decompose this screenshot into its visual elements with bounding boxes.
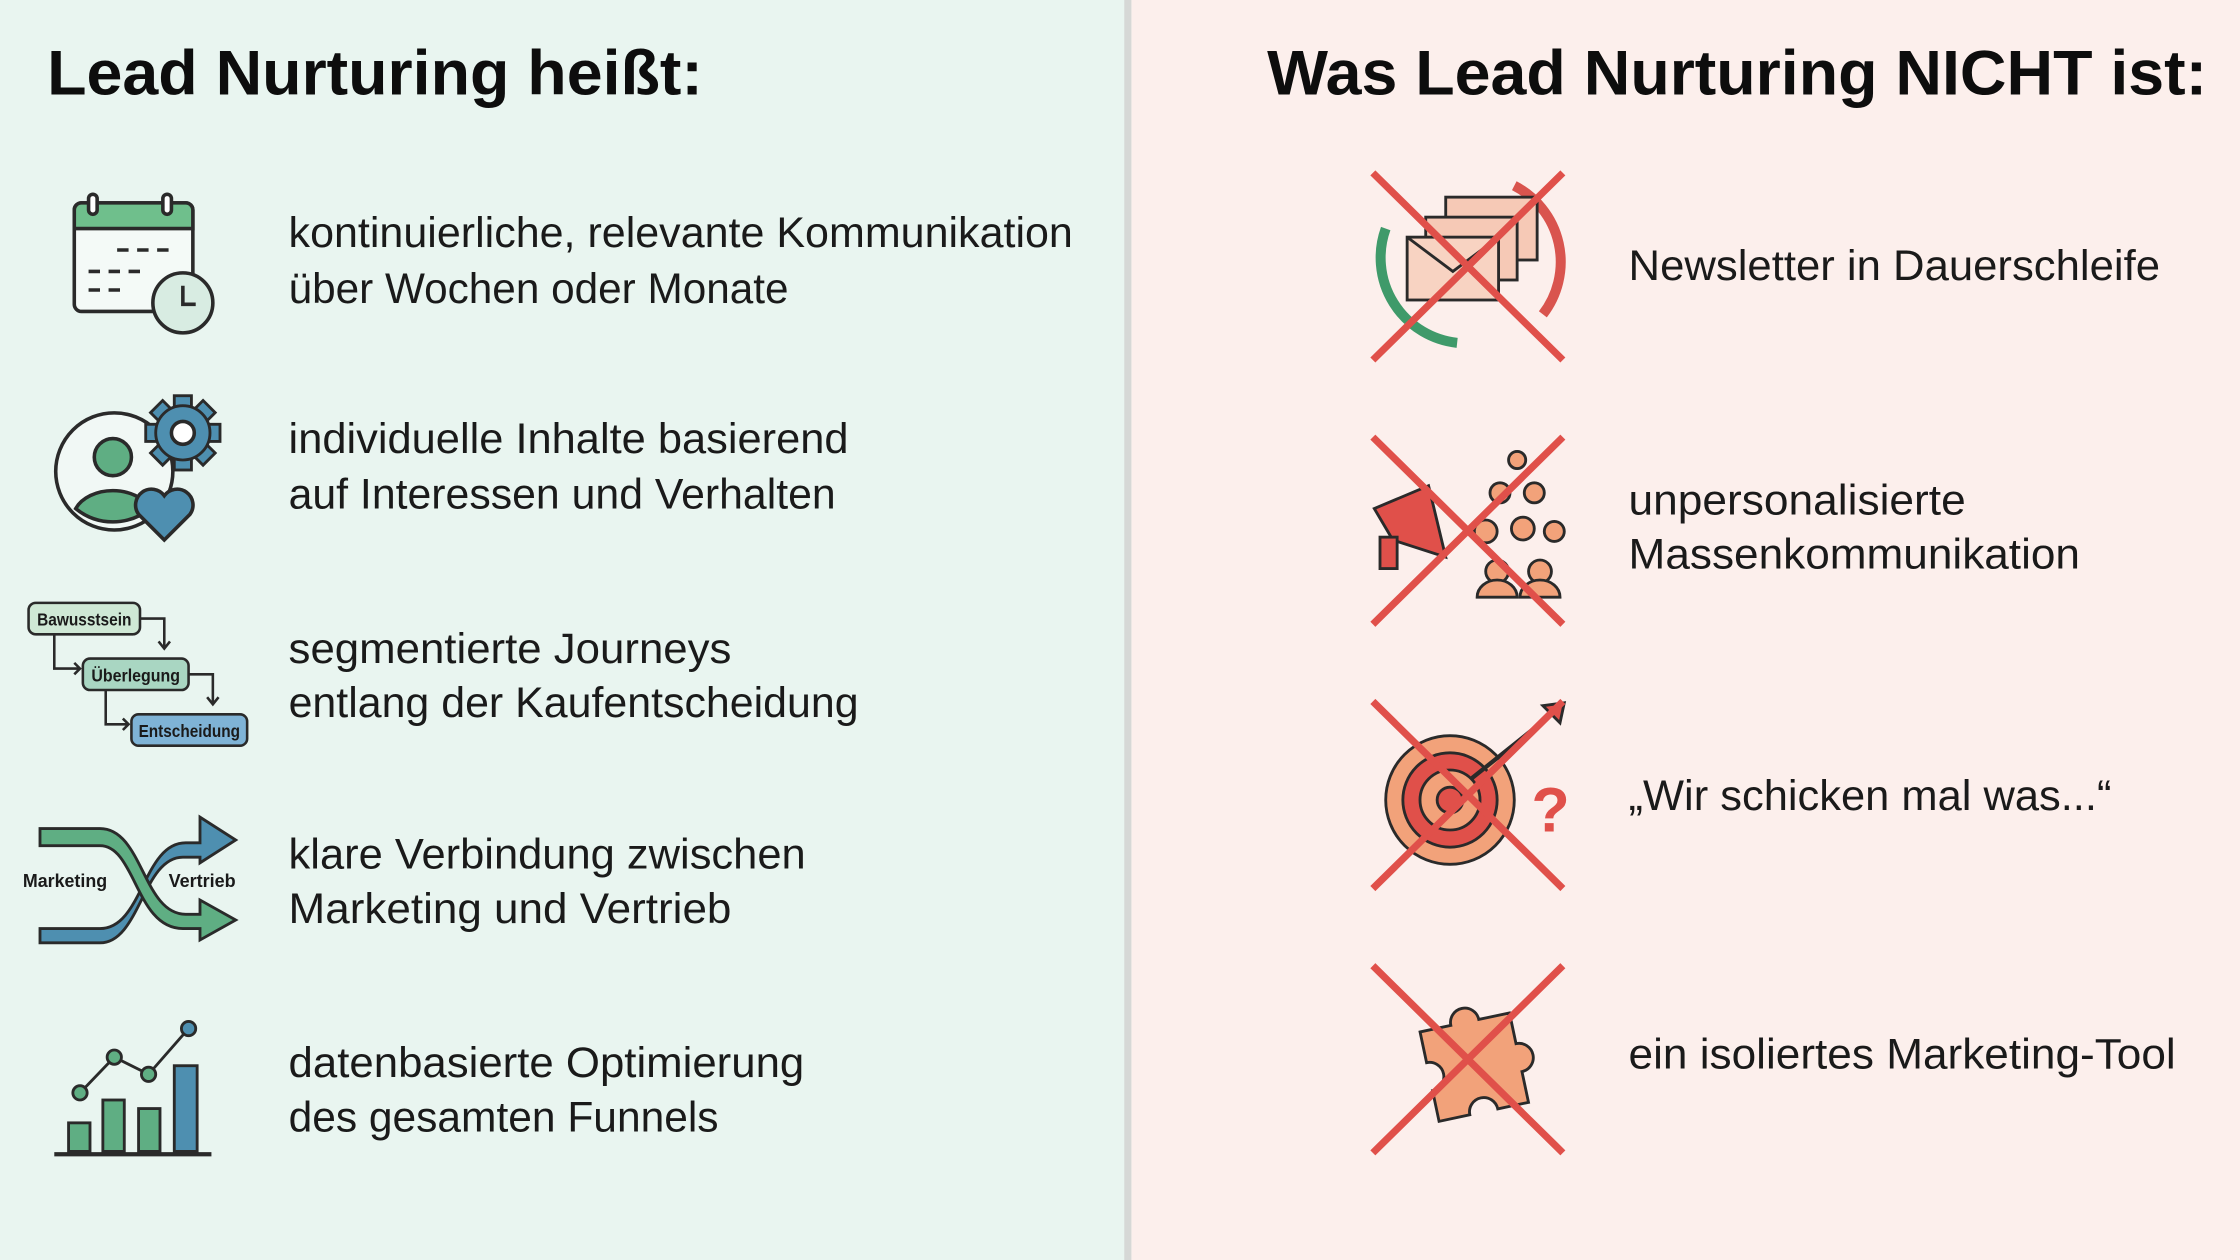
text: item 2: auf Interessen und Verhalten <box>289 471 836 519</box>
icon: marketing-vertrieb arrows: Vertrieb <box>169 870 236 891</box>
text: item 3: segmentierte Journeys <box>289 625 731 673</box>
panel: left list <box>23 194 1073 1154</box>
text: item 2 <box>289 415 849 519</box>
title: left: Lead Nurturing heißt: <box>47 38 703 108</box>
text: right item 2 <box>1629 476 2080 579</box>
text: item 2: individuelle Inhalte basierend <box>289 415 849 463</box>
text: item 5: des gesamten Funnels <box>289 1093 719 1141</box>
icon: crossed newsletter loop <box>1373 173 1563 360</box>
text: item 4 <box>289 831 806 933</box>
icon: bar chart <box>54 1021 211 1154</box>
icon: person with gear and heart <box>56 396 220 540</box>
text: item 3 <box>289 625 859 727</box>
icon: crossed puzzle piece <box>1373 966 1563 1153</box>
icon: journey steps: Bawusstsein <box>37 610 131 630</box>
panel: right list <box>1373 173 2176 1153</box>
text: item 5: datenbasierte Optimierung <box>289 1039 804 1087</box>
text: item 4: klare Verbindung zwischen <box>289 831 806 879</box>
text: item 1: über Wochen oder Monate <box>289 265 789 313</box>
icon: crossed target with question <box>1373 701 1570 889</box>
icon: calendar with clock <box>74 194 213 333</box>
icon: marketing-vertrieb arrows: Marketing <box>23 870 107 891</box>
icon: crossed target with question: ? <box>1531 775 1570 845</box>
text: item 1 <box>289 209 1073 313</box>
text: right item 1: Newsletter in Dauerschleife <box>1629 242 2160 290</box>
icon: journey steps: Überlegung <box>91 665 180 685</box>
text: right item 2: unpersonalisierte <box>1629 476 1966 524</box>
icon: marketing-vertrieb arrows <box>23 817 236 943</box>
text: right item 3: „Wir schicken mal was...“ <box>1629 772 2111 820</box>
text: item 5 <box>289 1039 804 1141</box>
icon: crossed megaphone crowd <box>1373 437 1564 624</box>
icon: journey steps: Entscheidung <box>139 721 240 741</box>
text: right item 2: Massenkommunikation <box>1629 531 2080 579</box>
text: item 1: kontinuierliche, relevante Kommunikation <box>289 209 1073 257</box>
text: right item 4: ein isoliertes Marketing-Tool <box>1629 1031 2176 1079</box>
text: item 3: entlang der Kaufentscheidung <box>289 679 859 727</box>
title: right: Was Lead Nurturing NICHT ist: <box>1267 38 2207 108</box>
icon: journey steps <box>29 603 247 746</box>
text: item 4: Marketing und Vertrieb <box>289 885 731 933</box>
